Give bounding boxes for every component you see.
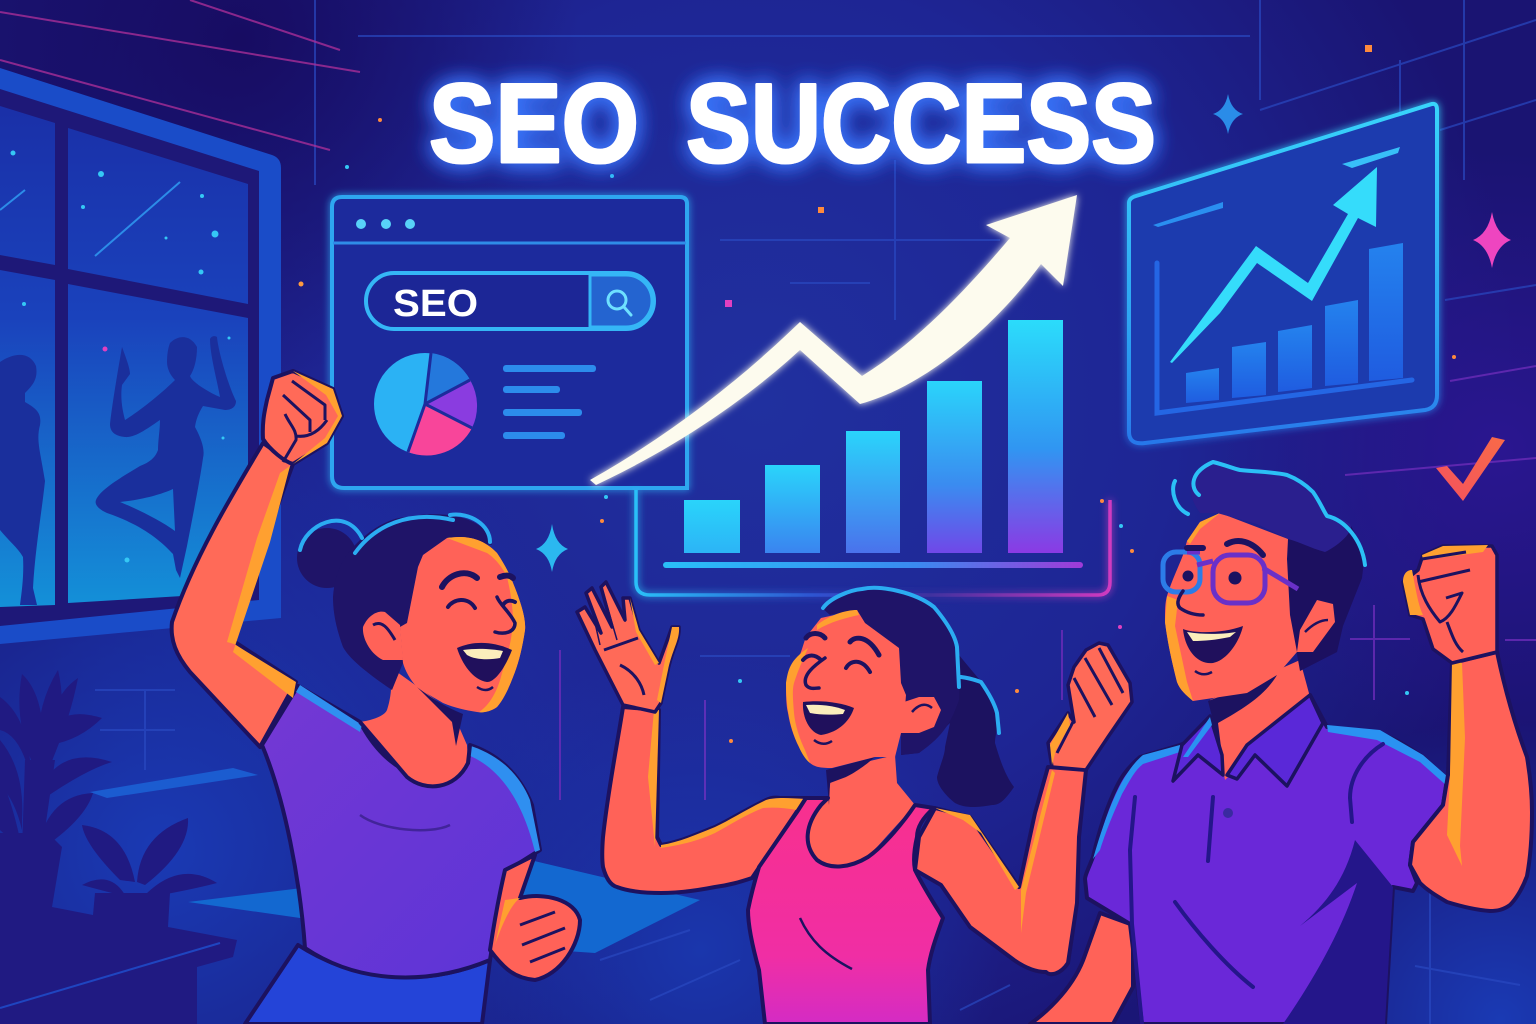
- monitor bars: [1186, 243, 1403, 403]
- raised fist: [263, 371, 342, 464]
- chest and neck: [805, 755, 915, 867]
- ear line: [373, 623, 395, 640]
- silhouette: right dancer: [96, 336, 236, 578]
- hair: [333, 514, 492, 690]
- face rim light: [786, 610, 859, 763]
- icon: magnifier: [608, 291, 631, 315]
- panel: browser SEO window: [332, 197, 687, 488]
- nose: [805, 658, 825, 688]
- panel: analytics monitor: [1129, 104, 1437, 443]
- face: [400, 537, 525, 712]
- tank fold: [800, 918, 852, 969]
- ear: [1297, 600, 1335, 652]
- eyes and brows: [1182, 570, 1242, 584]
- window with dancing silhouettes: [0, 68, 304, 644]
- lower wall highlights: [90, 768, 700, 953]
- neck: [360, 667, 468, 785]
- plant: small: [82, 818, 217, 897]
- hair: [821, 589, 960, 755]
- ponytail: [901, 650, 1014, 807]
- title: SUCCESS: [686, 61, 1156, 186]
- arrow: rising white growth arrow: [590, 195, 1077, 485]
- face rim light: [1165, 513, 1220, 701]
- shoulder highlights: [1093, 725, 1448, 859]
- person: right man with glasses: [1030, 462, 1532, 1024]
- lower fist and forearm: [490, 855, 580, 980]
- monitor trend arrow: [1170, 167, 1377, 363]
- silhouette: left dancer: [0, 355, 45, 605]
- collar: [1173, 695, 1323, 786]
- search text: SEO: [393, 283, 478, 325]
- sparkles: [536, 94, 1511, 572]
- chin shadow: [1208, 675, 1277, 755]
- neck: [1210, 660, 1310, 780]
- right open hand: [1048, 643, 1132, 770]
- eyes and brows: [442, 573, 513, 587]
- shirt shadow: [1283, 840, 1393, 1024]
- chin shadow: [417, 687, 463, 746]
- left arm: [602, 707, 806, 893]
- hair highlight: [300, 515, 490, 553]
- shirt fold lines: [1130, 744, 1383, 1024]
- title: [429, 61, 1156, 186]
- shirt: [262, 686, 540, 977]
- monitor chart axes: [1157, 263, 1412, 413]
- pie chart: [374, 353, 477, 456]
- ear: [363, 612, 403, 660]
- hair back: [1250, 490, 1365, 671]
- browser frame: [332, 197, 687, 488]
- bar chart: [636, 320, 1110, 595]
- icon: check mark: [1436, 437, 1505, 501]
- chart frame: [636, 490, 1110, 595]
- mouth: [1183, 626, 1243, 663]
- plant: large: [0, 670, 112, 850]
- raised arm: [1410, 652, 1532, 911]
- face: [1165, 513, 1297, 701]
- table and pots: [0, 833, 237, 1024]
- lower left arm: [1030, 913, 1133, 1024]
- mouth: [457, 643, 512, 682]
- tank top: [748, 798, 943, 1024]
- window panes: [0, 106, 248, 607]
- face rim light: [447, 537, 525, 712]
- person: centre woman laughing: [577, 582, 1132, 1024]
- window dots: [356, 219, 415, 229]
- collar highlight: [1183, 717, 1212, 757]
- glasses: [1163, 552, 1298, 603]
- person: left woman cheering: [172, 371, 580, 1024]
- title: SEO: [429, 61, 639, 186]
- pants: [245, 945, 490, 1024]
- shirt fold: [360, 815, 450, 830]
- mouth: [803, 701, 854, 735]
- raised open hand: [577, 582, 679, 712]
- bars: [684, 320, 1063, 553]
- hair top: [1190, 462, 1351, 552]
- right arm: [915, 767, 1086, 974]
- hair bun: [297, 528, 357, 588]
- eyes and brows: [806, 634, 879, 655]
- hair highlight: [823, 588, 999, 733]
- shirt: [1085, 695, 1447, 1024]
- hair highlight: [1173, 462, 1365, 565]
- stars: [10, 150, 230, 562]
- face: [786, 610, 906, 768]
- search box: [366, 273, 654, 329]
- ear: [901, 697, 941, 733]
- monitor header lines: [1153, 147, 1400, 227]
- raised arm: [172, 443, 296, 747]
- chart baseline: [663, 562, 1083, 568]
- chin shadow: [826, 757, 875, 805]
- shirt button: [1223, 808, 1233, 818]
- plants and table silhouette: [0, 670, 237, 1024]
- window frame: [0, 68, 281, 644]
- nose: [495, 597, 515, 633]
- raised fist: [1403, 545, 1497, 663]
- list lines: [503, 365, 596, 439]
- nose: [1178, 591, 1203, 615]
